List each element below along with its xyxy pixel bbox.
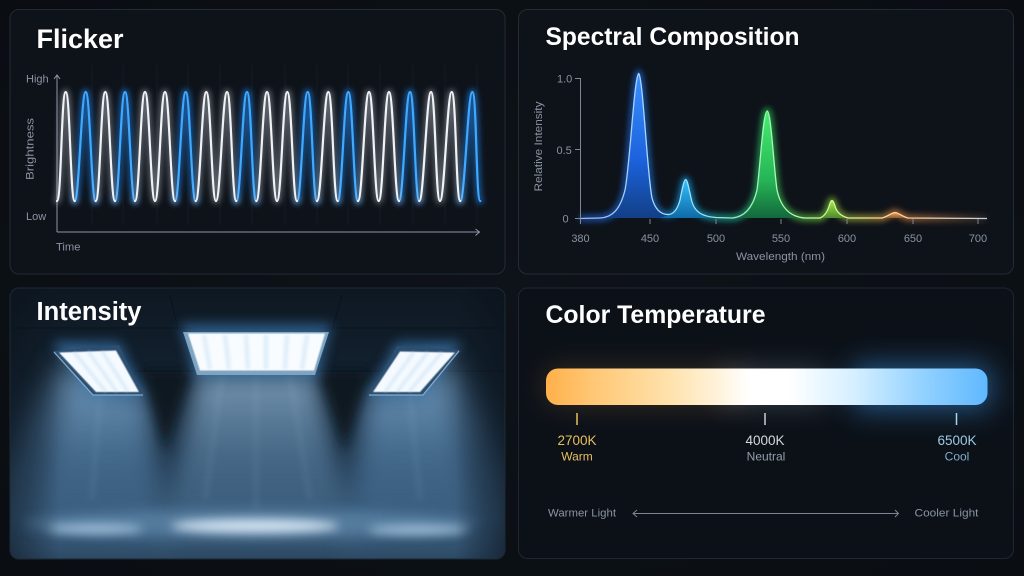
label: 4000K Neutral: Neutral	[747, 450, 785, 464]
left ceiling lamp	[53, 345, 143, 395]
y-axis values	[556, 74, 572, 226]
centre beam streaks	[92, 376, 420, 510]
label: 4000K Neutral	[745, 433, 785, 464]
x-axis values: 500	[707, 233, 725, 245]
label: 6500K Cool	[937, 433, 977, 464]
y-axis values: 0	[562, 214, 569, 226]
label: Time: Time	[56, 242, 80, 254]
right ceiling lamp	[369, 346, 460, 395]
flicker panel card	[10, 10, 505, 274]
panel: flicker	[10, 10, 505, 274]
label: 2700K Warm: 2700K	[557, 433, 597, 448]
spectral panel card	[518, 10, 1014, 274]
temperature gradient bar	[546, 368, 988, 405]
label: 6500K Cool: 6500K	[937, 433, 977, 448]
x-axis values: 380	[571, 233, 590, 245]
spectrum glow	[580, 74, 987, 218]
spectrum curve outline	[580, 74, 987, 218]
x-axis values	[571, 233, 987, 245]
ceiling light scene	[0, 288, 515, 560]
x-axis values: 550	[772, 233, 790, 245]
x-axis values: 650	[904, 233, 922, 245]
label: Low: Low	[26, 211, 46, 223]
light beams	[30, 372, 480, 555]
panel: color temperature	[518, 288, 1014, 558]
heading: Color Temperature: Color Temperature	[546, 301, 766, 329]
label: 2700K Warm: Warm	[561, 450, 593, 464]
label: Brightness: Brightness	[24, 117, 36, 180]
axis label: Wavelength (nm): Wavelength (nm)	[736, 251, 825, 263]
heading: Flicker: Flicker	[36, 24, 124, 54]
gradient bar glow	[546, 364, 992, 410]
floor light pools	[22, 510, 478, 538]
outer light spill	[10, 352, 503, 514]
waveform: blue cycles	[75, 92, 480, 201]
label: Warmer Light: Warmer Light	[548, 508, 616, 520]
y-axis values: 1.0	[557, 74, 572, 86]
color temperature panel card	[518, 288, 1014, 558]
axis label: Relative Intensity: Relative Intensity	[533, 101, 545, 192]
spectrum peak fills	[600, 74, 908, 218]
x-axis values: 700	[969, 233, 987, 245]
lamp halos	[52, 324, 462, 398]
double-headed arrow	[633, 510, 898, 517]
waveform: white cycles	[57, 92, 460, 201]
x-axis values: 600	[838, 233, 856, 245]
scale ticks	[577, 413, 956, 425]
heading: Spectral Composition: Spectral Composition	[546, 23, 800, 51]
spectrum axes and ticks	[575, 78, 978, 224]
y-axis values: 0.5	[556, 145, 572, 157]
panel: spectral composition	[518, 10, 1014, 274]
centre ceiling lamp	[183, 332, 329, 375]
heading: Intensity: Intensity	[36, 298, 142, 326]
panel: intensity	[0, 288, 515, 560]
label: 2700K Warm	[557, 433, 597, 464]
x-axis values: 450	[641, 233, 659, 245]
flicker chart axes	[54, 75, 480, 236]
label: 6500K Cool: Cool	[945, 450, 969, 464]
label: High: High	[26, 74, 49, 86]
dark wedges between beams	[143, 372, 368, 448]
label: 4000K Neutral: 4000K	[745, 433, 785, 448]
label: Cooler Light: Cooler Light	[914, 508, 978, 520]
intensity panel border	[10, 288, 505, 559]
